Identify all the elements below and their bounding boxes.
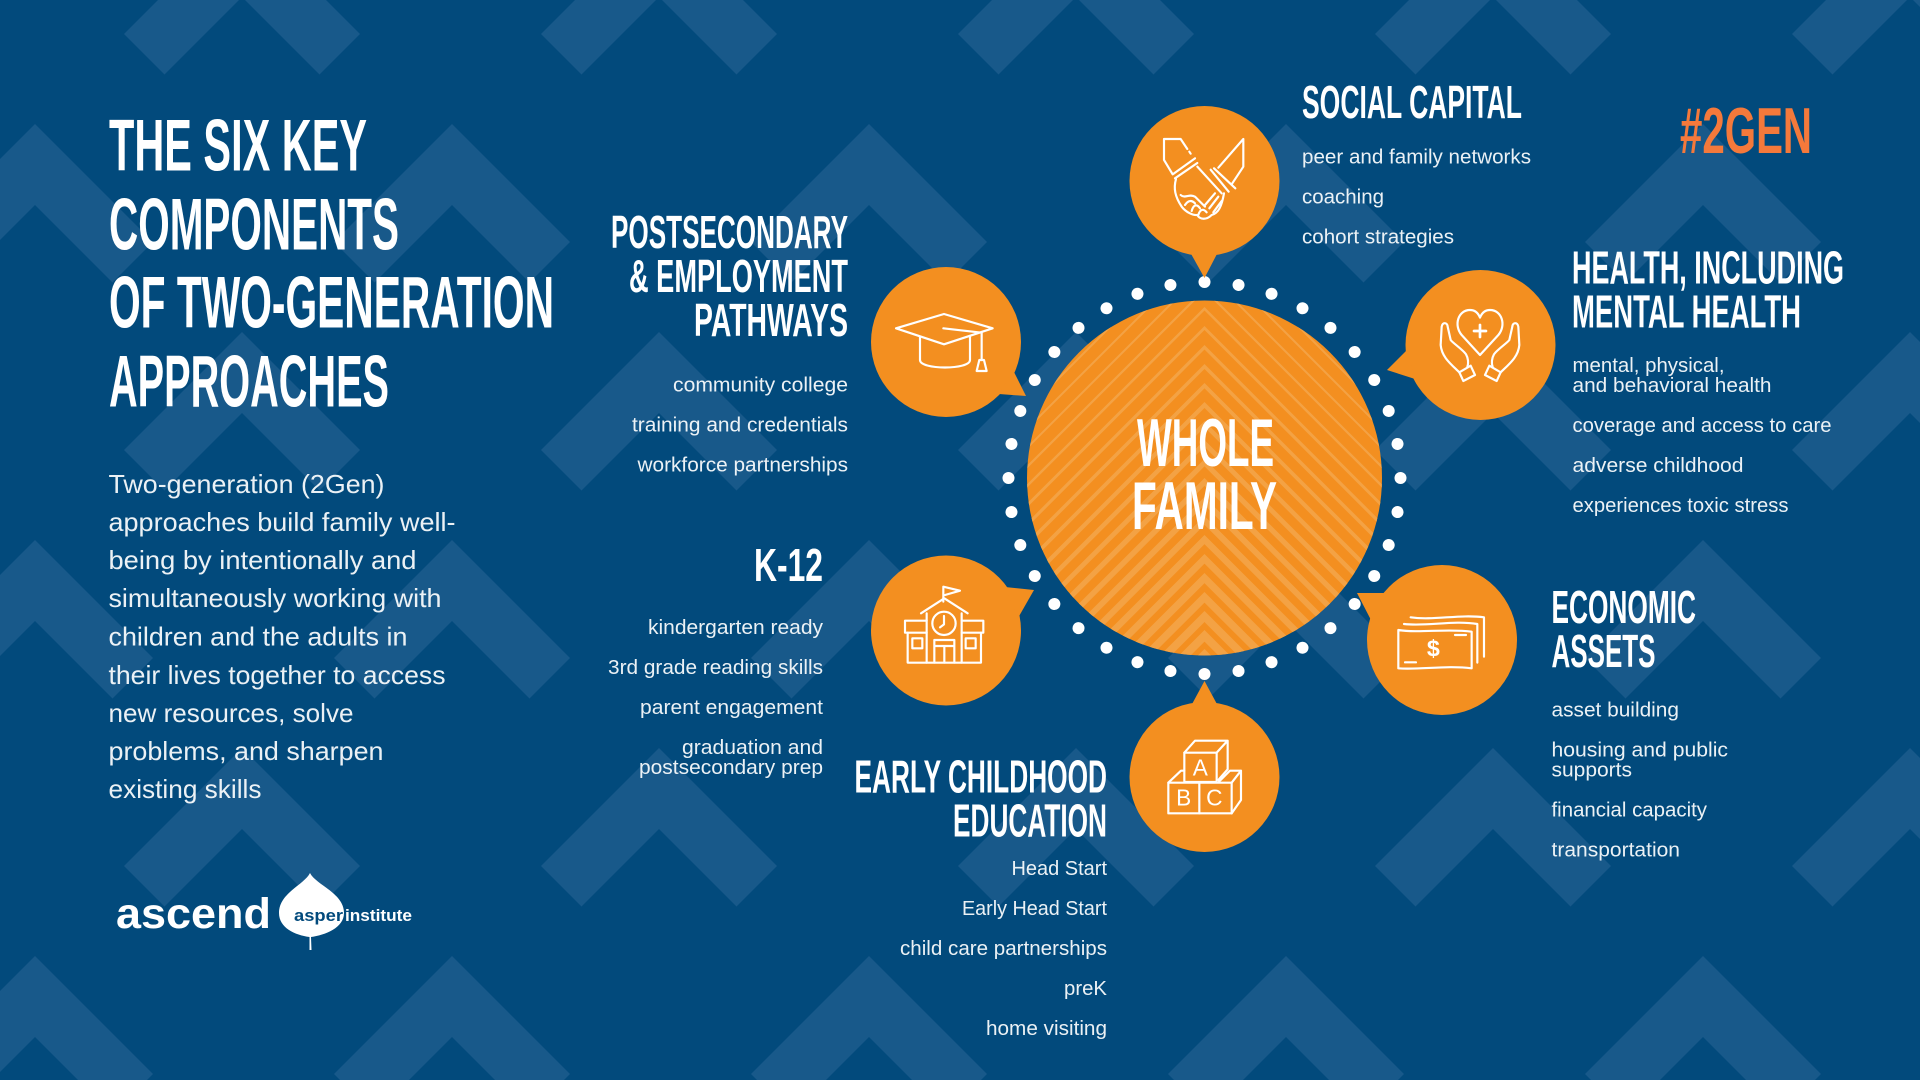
bubble: economic assets [1357,565,1517,715]
intro paragraph: Two-generation (2Gen) [108,469,384,499]
title: APPROACHES [109,342,389,422]
list: postsecondary [632,374,848,476]
list: early childhood: home visiting [986,1017,1107,1040]
heading: postsecondary: POSTSECONDARY [611,206,848,258]
list: early childhood: preK [1064,977,1107,1000]
heading: postsecondary: & EMPLOYMENT [629,250,848,302]
intro paragraph [108,469,456,804]
heading: k-12: K-12 [754,539,823,591]
icon: alphabet blocks: B [1176,785,1191,811]
list: health: experiences toxic stress [1572,494,1788,517]
list: k-12: kindergarten ready [648,616,824,639]
intro paragraph: their lives together to access [108,660,445,690]
list: economic assets: asset building [1552,698,1679,722]
list: social capital: peer and family networks [1302,146,1531,168]
logo: ascend aspen institute: asper [294,906,343,925]
bubble: social capital [1130,106,1280,278]
icon: graduation cap [896,314,993,371]
icon: stack of money: $ [1427,636,1440,662]
central circle: whole family [1027,300,1382,656]
list: economic assets: supports [1552,758,1632,782]
logo: ascend aspen institute: ascend [116,890,271,938]
heading: early childhood [854,751,1107,847]
bubble: health [1387,270,1556,420]
intro paragraph: being by intentionally and [108,545,416,575]
icon: school [905,587,983,663]
list: economic assets: transportation [1552,838,1680,862]
list: economic assets [1552,698,1728,862]
icon: stack of money [1398,616,1484,669]
list: health: and behavioral health [1572,374,1772,397]
list: postsecondary: training and credentials [632,414,848,436]
intro paragraph: new resources, solve [108,698,354,728]
heading: economic assets [1552,581,1696,677]
panel: k-12 [608,539,1034,779]
list: early childhood: child care partnerships [900,937,1107,960]
icon: alphabet blocks: C [1206,785,1223,811]
intro paragraph: problems, and sharpen [108,736,384,766]
heading: postsecondary [611,206,848,346]
title: OF TWO-GENERATION [109,262,554,344]
heading: postsecondary: PATHWAYS [694,294,848,346]
list: economic assets: housing and public [1552,738,1728,762]
logo: ascend aspen institute [116,873,412,950]
list: early childhood: Early Head Start [962,897,1107,920]
list: social capital [1302,146,1531,248]
heading: economic assets: ECONOMIC [1552,581,1696,633]
intro paragraph: simultaneously working with [108,583,442,613]
panel: health including mental health [1387,242,1844,517]
icon: alphabet blocks [1168,741,1241,813]
panel: social capital [1130,76,1531,278]
bubble: k-12 [871,556,1034,706]
title: COMPONENTS [109,184,399,266]
central circle: whole family: FAMILY [1132,468,1277,544]
list: k-12: 3rd grade reading skills [608,656,823,679]
list: health: adverse childhood [1572,454,1744,477]
list: health: mental, physical, [1572,354,1724,377]
list: social capital: cohort strategies [1302,226,1454,248]
panel: postsecondary and employment pathways [611,206,1026,476]
icon: handshake [1164,139,1243,219]
heading: early childhood: EARLY CHILDHOOD [854,751,1107,803]
list: economic assets: financial capacity [1552,798,1708,822]
list: early childhood: Head Start [1012,857,1107,880]
list: social capital: coaching [1302,186,1384,208]
list: postsecondary: workforce partnerships [636,454,848,476]
title [109,106,554,422]
heading: economic assets: ASSETS [1552,625,1656,677]
intro paragraph: approaches build family well- [108,507,456,537]
list: k-12: postsecondary prep [639,756,823,779]
bubble: postsecondary [871,267,1026,417]
title: THE SIX KEY [109,106,367,186]
heading: early childhood: EDUCATION [953,795,1107,847]
list: health [1572,354,1832,517]
intro paragraph: children and the adults in [108,622,408,652]
heading: social capital: SOCIAL CAPITAL [1302,76,1522,128]
hashtag: #2GEN [1680,94,1812,167]
list: health: coverage and access to care [1572,414,1832,437]
panel: early childhood education [854,681,1280,1040]
dotted ring [1002,276,1406,680]
list: postsecondary: community college [673,374,848,396]
heading: health [1572,242,1844,338]
central circle: whole family: WHOLE [1137,405,1274,481]
icon: hands holding heart [1441,310,1519,381]
list: k-12: graduation and [682,736,823,759]
list: k-12 [608,616,824,779]
intro paragraph: existing skills [108,774,262,804]
icon: alphabet blocks: A [1193,754,1209,780]
panel: economic assets [1357,565,1728,862]
logo: ascend aspen institute: institute [345,906,412,925]
list: k-12: parent engagement [640,696,823,719]
bubble: early childhood [1130,681,1280,852]
list: early childhood [900,857,1107,1040]
